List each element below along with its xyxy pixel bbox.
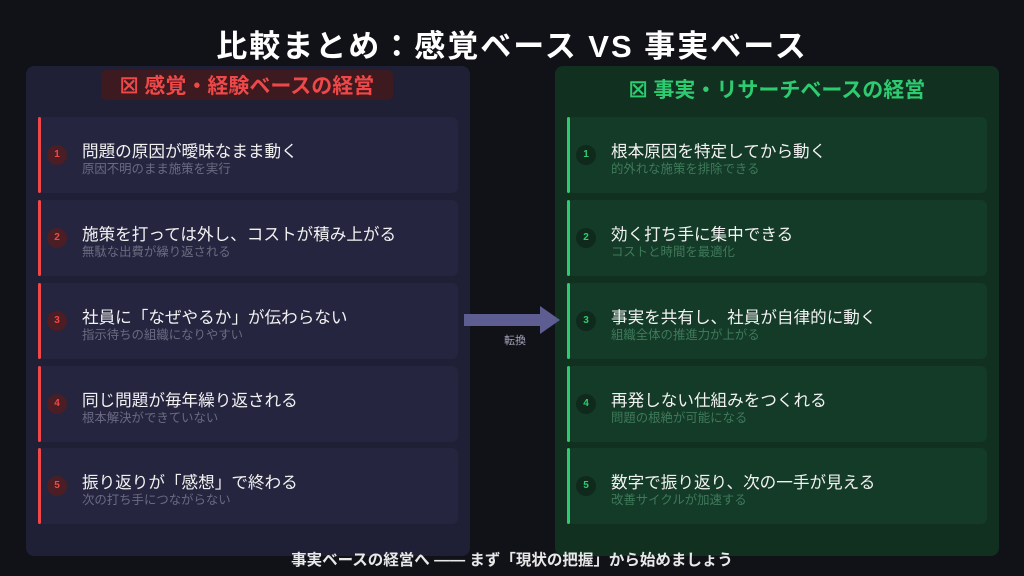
card 4: 4 — [54, 398, 60, 409]
card 3: 指示待ちの組織になりやすい — [82, 328, 243, 342]
card 4: 問題の根絶が可能になる — [611, 411, 747, 425]
card 2: 効く打ち手に集中できる — [611, 225, 793, 244]
card 5: 振り返りが「感想」で終わる — [82, 473, 298, 492]
header: sense-based: ☒ 感覚・経験ベースの経営 — [120, 75, 374, 98]
card 4 — [567, 366, 987, 442]
card 5: 5 — [54, 480, 60, 491]
card 4 — [38, 366, 458, 442]
card 2: 2 — [583, 232, 589, 243]
card 3: 3 — [583, 315, 589, 326]
card 1 — [567, 117, 987, 193]
card 2: コストと時間を最適化 — [611, 245, 735, 259]
card 5 — [38, 448, 458, 524]
card 3: 社員に「なぜやるか」が伝わらない — [82, 308, 348, 327]
card 2: 無駄な出費が繰り返される — [82, 245, 231, 259]
card 5: 数字で振り返り、次の一手が見える — [611, 473, 875, 492]
card 2 — [567, 200, 987, 276]
card 4: 4 — [583, 398, 589, 409]
arrow label: 転換 — [504, 335, 526, 347]
footer message: 事実ベースの経営へ —— まず「現状の把握」から始めましょう — [291, 552, 733, 569]
card 3 — [38, 283, 458, 359]
card 4: 根本解決ができていない — [82, 411, 218, 425]
header: sense-based — [101, 70, 393, 100]
card 3: 組織全体の推進力が上がる — [611, 328, 760, 342]
card 5 — [567, 448, 987, 524]
card 1: 1 — [54, 149, 60, 160]
card 5: 改善サイクルが加速する — [611, 493, 747, 507]
card 1: 1 — [583, 149, 589, 160]
header: fact-based: ☒ 事実・リサーチベースの経営 — [629, 79, 925, 102]
card 3: 事実を共有し、社員が自律的に動く — [611, 308, 876, 327]
card 4: 同じ問題が毎年繰り返される — [82, 391, 298, 410]
card 5: 5 — [583, 480, 589, 491]
panel: fact-based — [555, 66, 999, 556]
card 1 — [38, 117, 458, 193]
title: 比較まとめ：感覚ベース VS 事実ベース — [216, 29, 808, 64]
card 1: 根本原因を特定してから動く — [611, 142, 826, 161]
card 2: 2 — [54, 232, 60, 243]
arrow: transition — [464, 306, 560, 334]
card 1: 的外れな施策を排除できる — [611, 162, 759, 176]
card 2: 施策を打っては外し、コストが積み上がる — [82, 225, 396, 244]
card 2 — [38, 200, 458, 276]
card 1: 原因不明のまま施策を実行 — [82, 162, 231, 176]
card 3: 3 — [54, 315, 60, 326]
card 1: 問題の原因が曖昧なまま動く — [82, 142, 298, 161]
panel: sense-based — [26, 66, 470, 556]
card 5: 次の打ち手につながらない — [82, 493, 231, 507]
card 3 — [567, 283, 987, 359]
card 4: 再発しない仕組みをつくれる — [611, 391, 827, 410]
